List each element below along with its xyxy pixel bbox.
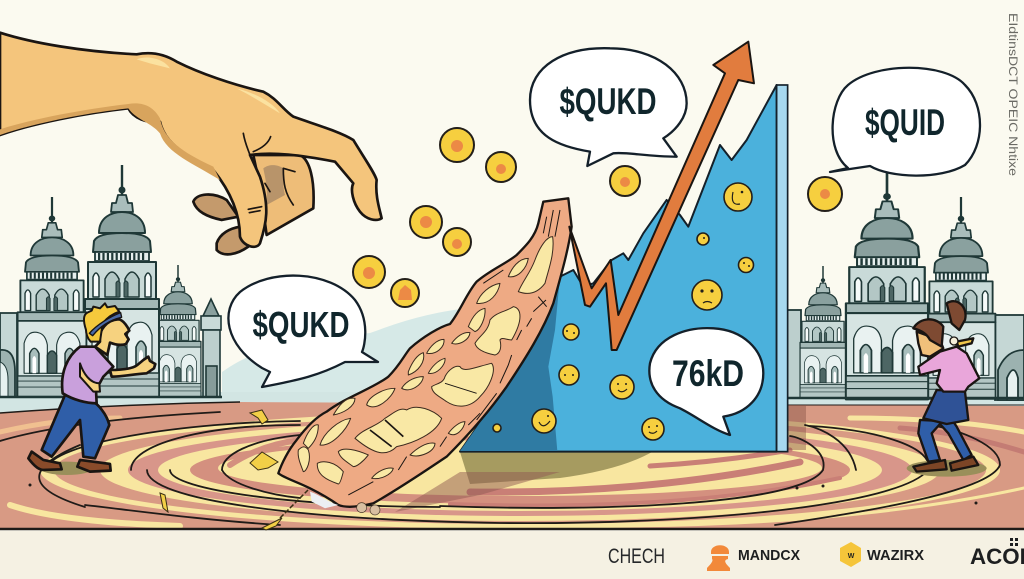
speech bubble: 76kD — [649, 328, 763, 435]
skyline: right palace — [787, 172, 1024, 400]
distant pale hill — [222, 300, 560, 420]
speech bubble: left — [228, 276, 378, 387]
left running figure — [28, 303, 155, 475]
shadow under chart — [460, 452, 652, 484]
logo: MANDCX: MANDCX — [738, 547, 800, 564]
skyline: left palace — [0, 165, 222, 397]
speech bubble: top right: $QUID — [865, 102, 945, 143]
reaching hand — [0, 33, 382, 254]
logo: WAZIRX — [840, 542, 924, 567]
logo: WAZIRX: W — [848, 553, 855, 560]
vertical side caption: EIdtinsDCT OPEIC Nhtixe — [1006, 13, 1018, 176]
footer band — [0, 531, 1024, 579]
speech bubble: top centre: $QUKD — [560, 81, 656, 122]
blue rising chart — [460, 85, 788, 452]
debris — [160, 410, 282, 530]
falling coins — [353, 128, 842, 307]
swirling ground — [0, 402, 1024, 530]
speech bubble: left: $QUKD — [252, 304, 350, 345]
speech bubble: top right — [830, 68, 980, 176]
logo: MANDCX — [707, 545, 800, 571]
footer label: CHECH — [608, 545, 665, 568]
torn cloth / map tatter — [278, 198, 572, 515]
logo: WAZIRX: WAZIRX — [867, 547, 924, 564]
right hunched figure — [907, 301, 987, 477]
orange trend arrow — [569, 42, 754, 350]
speech bubble: top centre — [530, 48, 687, 166]
smiley coins on chart — [493, 183, 754, 440]
speech bubble: 76kD: 76kD — [672, 353, 744, 394]
